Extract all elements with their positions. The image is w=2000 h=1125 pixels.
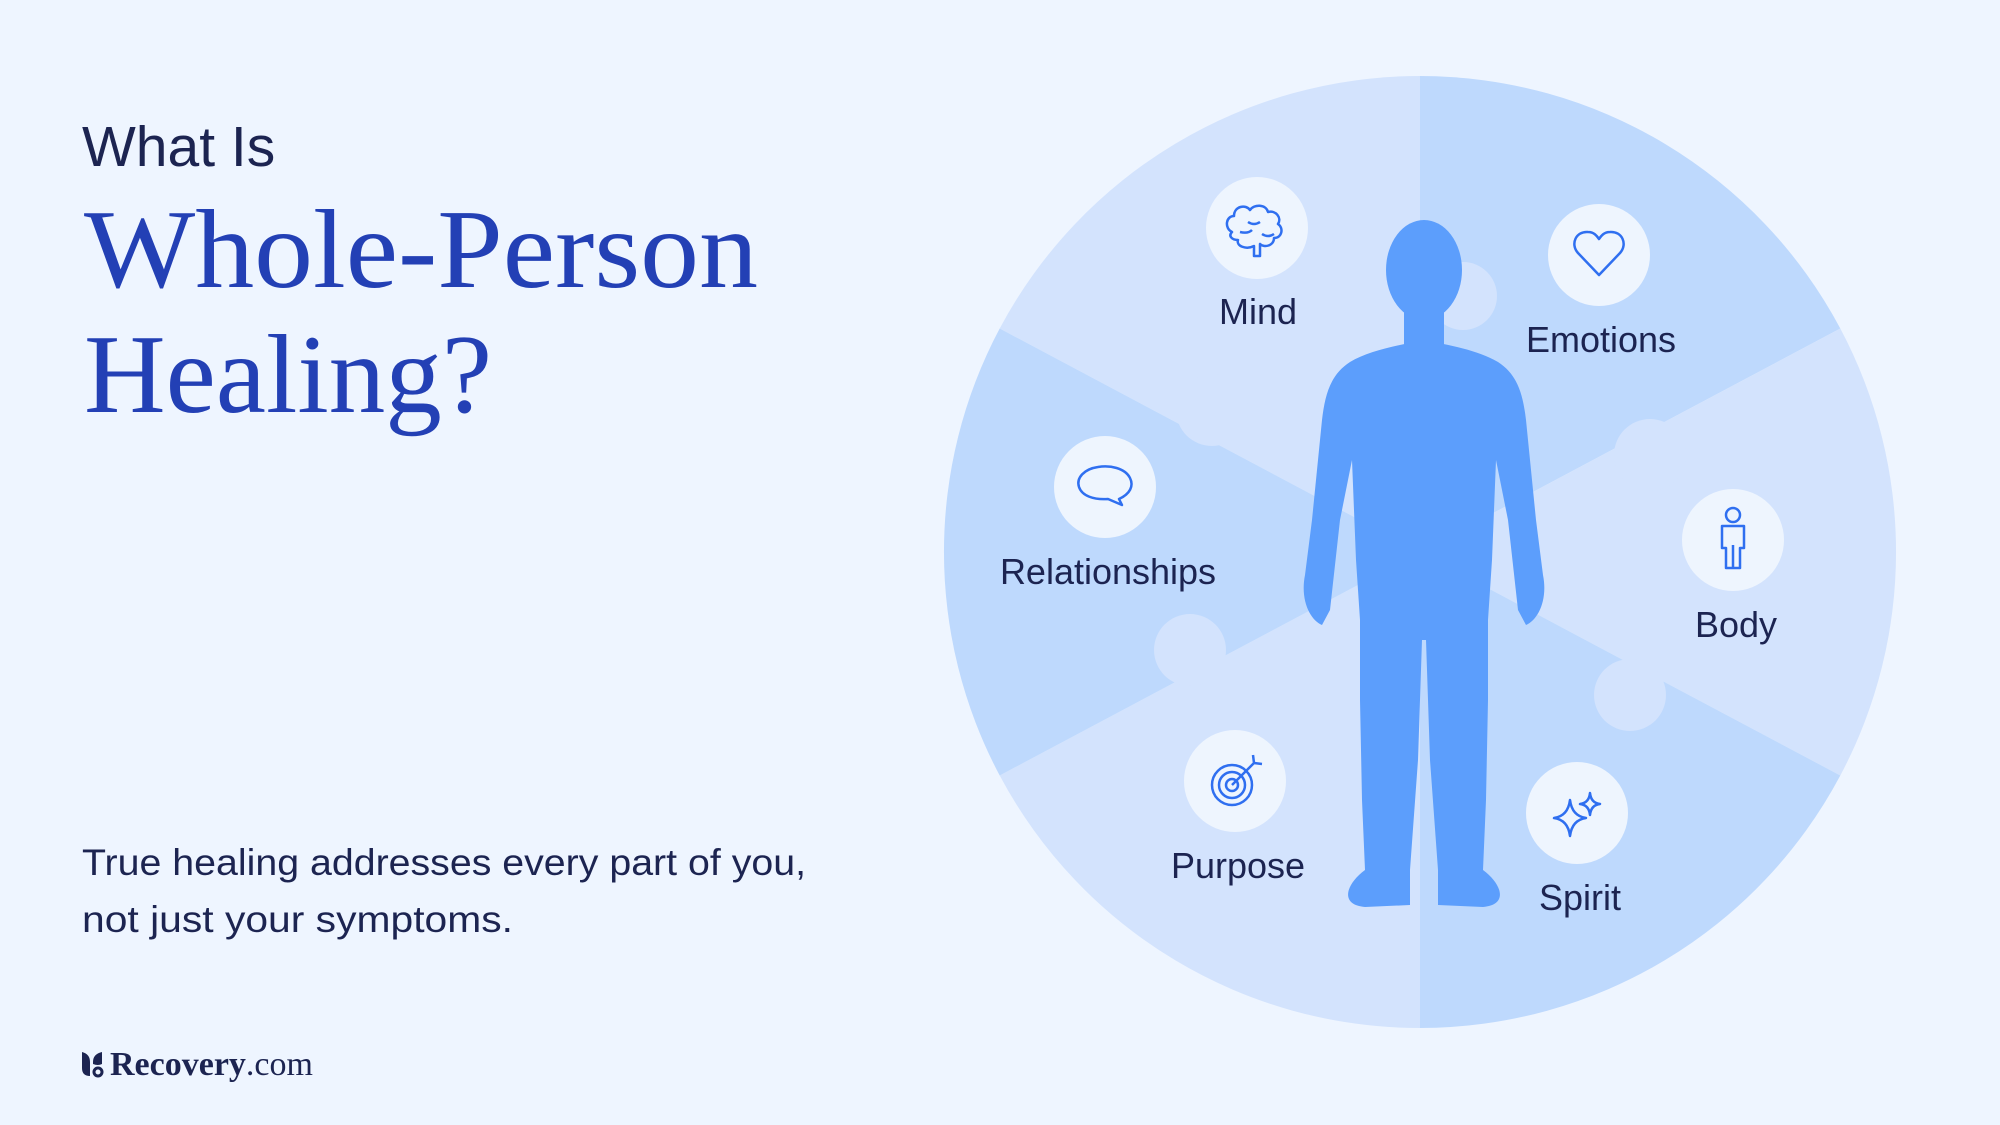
label: Body: Body bbox=[1695, 604, 1777, 645]
wedge: mind (light) bbox=[1000, 76, 1420, 552]
subtitle text: True healing addresses every part of you, bbox=[82, 842, 806, 883]
icon: target bbox=[1212, 755, 1262, 805]
label: Emotions: Emotions bbox=[1526, 319, 1676, 360]
logo: Recovery.com: Recovery.com bbox=[110, 1046, 313, 1083]
subtitle text bbox=[82, 842, 806, 940]
label: Mind: Mind bbox=[1219, 291, 1297, 332]
subtitle text: not just your symptoms. bbox=[82, 899, 513, 940]
icon: sparkles bbox=[1554, 793, 1600, 836]
puzzle knobs bbox=[1154, 262, 1686, 844]
icon: brain bbox=[1227, 206, 1281, 256]
item: spirit bbox=[1526, 762, 1628, 918]
title: Whole-Person Healing?: Healing? bbox=[84, 313, 492, 437]
item: mind bbox=[1206, 177, 1308, 332]
item: relationships bbox=[1000, 436, 1216, 592]
title: Whole-Person Healing?: Whole-Person bbox=[84, 188, 758, 312]
label: Relationships: Relationships bbox=[1000, 551, 1216, 592]
chart: whole-person puzzle circle bbox=[944, 76, 1896, 1028]
title: Whole-Person Healing? bbox=[84, 188, 758, 437]
icon: standing person bbox=[1722, 508, 1744, 568]
icon: heart bbox=[1574, 232, 1624, 275]
label: Purpose: Purpose bbox=[1171, 845, 1305, 886]
item: purpose bbox=[1171, 730, 1305, 886]
icon: speech bubble bbox=[1078, 466, 1132, 505]
wedge: emotions (dark) bbox=[1420, 76, 1840, 552]
wedge: spirit (dark) bbox=[1420, 552, 1840, 1028]
label: Spirit: Spirit bbox=[1539, 877, 1621, 918]
item: body bbox=[1682, 489, 1784, 645]
wedge: purpose (light) bbox=[1000, 552, 1420, 1028]
person silhouette bbox=[1304, 220, 1544, 907]
wedge: body (light) bbox=[1420, 328, 1896, 776]
wedge: relationships (dark) bbox=[944, 328, 1420, 776]
heading: What Is: What Is bbox=[82, 115, 275, 179]
item: emotions bbox=[1526, 204, 1676, 360]
